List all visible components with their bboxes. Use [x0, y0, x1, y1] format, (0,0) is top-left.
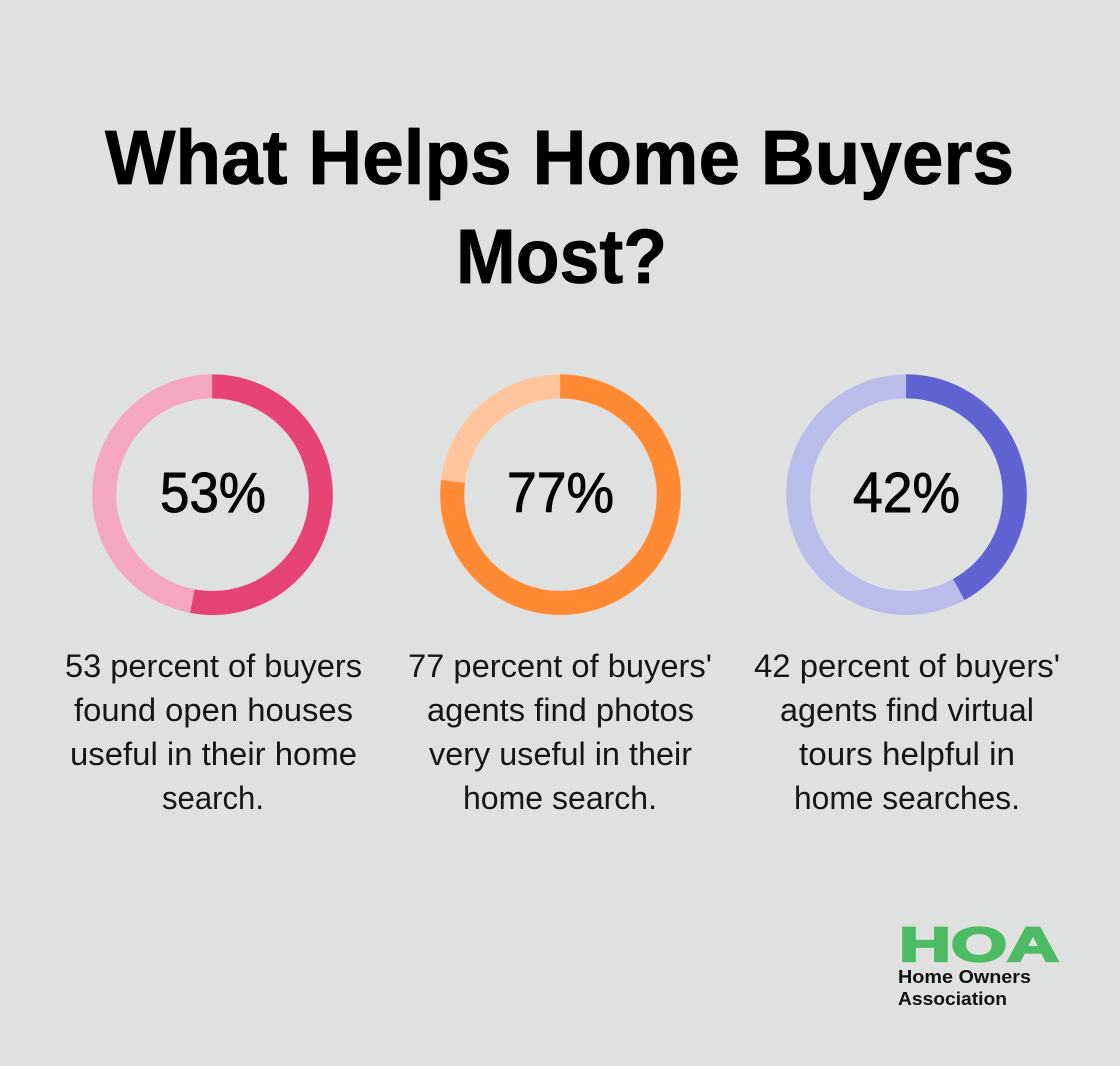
value: 53%: 53% [160, 461, 266, 525]
description: virtual tours [754, 648, 1060, 816]
description: open houses: search. [162, 780, 264, 816]
description: photos: 77 percent of buyers' [408, 648, 712, 684]
description: open houses [65, 648, 362, 816]
title: Most? [456, 214, 667, 300]
donut chart: 77% [452, 386, 669, 603]
description: virtual tours: 42 percent of buyers' [754, 648, 1060, 684]
logo: HOA Home Owners Association: HOA [899, 919, 1059, 972]
value: 77%: 77% [507, 461, 614, 525]
description: photos: agents find photos [427, 692, 694, 728]
logo: HOA Home Owners Association [898, 919, 1059, 1009]
panel: virtual tours 42% [754, 386, 1060, 816]
panel: open houses 53% [65, 386, 362, 816]
description: virtual tours: home searches. [794, 780, 1020, 816]
description: open houses: found open houses [74, 692, 353, 728]
panel: photos 77% [408, 386, 712, 816]
donut chart: 53% [104, 386, 321, 603]
donut chart: 42% [798, 386, 1015, 603]
logo: HOA Home Owners Association: Home Owners [898, 967, 1031, 987]
logo: HOA Home Owners Association: Association [898, 989, 1007, 1009]
description: photos [408, 648, 712, 816]
description: open houses: 53 percent of buyers [65, 648, 362, 684]
title [105, 115, 1014, 300]
value: 42%: 42% [853, 461, 960, 525]
title: What Helps Home Buyers [105, 115, 1014, 201]
description: virtual tours: agents find virtual [780, 692, 1034, 728]
description: photos: very useful in their [429, 736, 692, 772]
description: virtual tours: tours helpful in [799, 736, 1015, 772]
description: open houses: useful in their home [70, 736, 357, 772]
description: photos: home search. [463, 780, 657, 816]
